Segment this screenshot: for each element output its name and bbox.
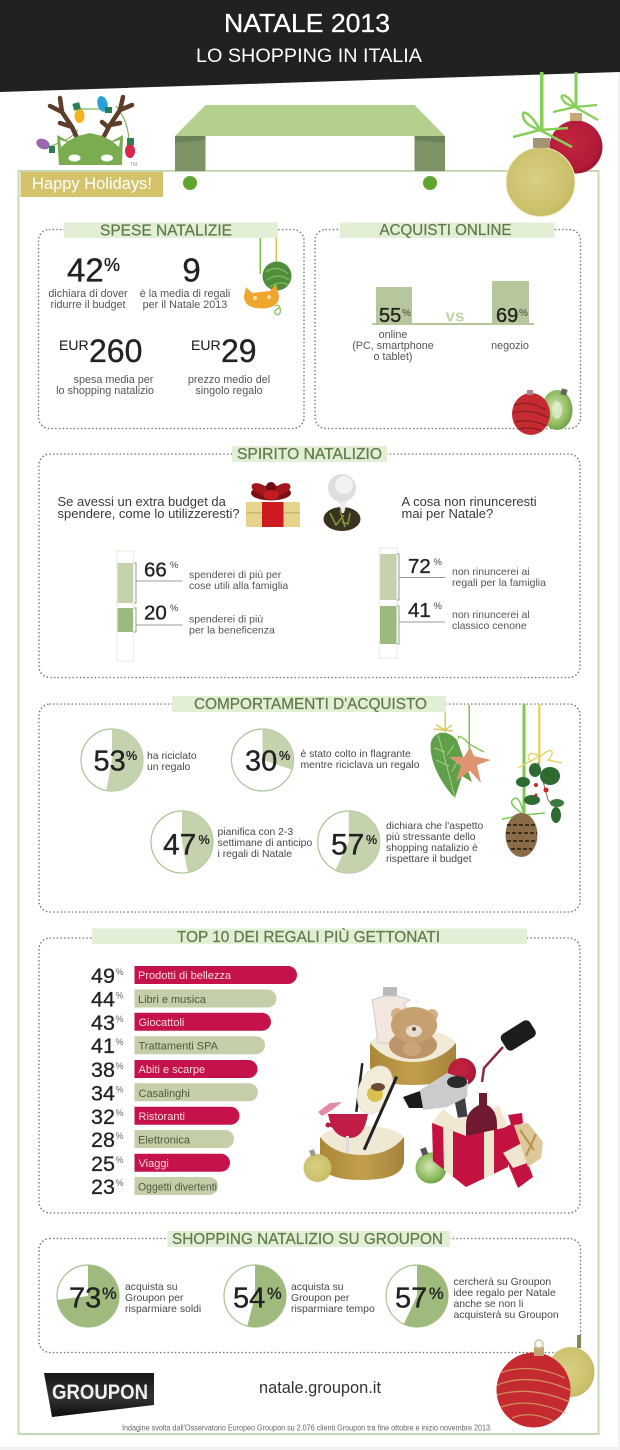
- icon: gift box: [246, 481, 300, 527]
- question: never give up: [402, 494, 537, 521]
- pie stat: 73 percent: acquista su: [125, 1282, 178, 1293]
- bar chart: online vs store: [352, 281, 534, 363]
- pie stat: 47 percent: i regali di Natale: [218, 849, 292, 860]
- pie stat: 47 percent: pianifica con 2-3: [218, 827, 293, 838]
- bar chart: online vs store: online: [379, 329, 407, 341]
- groupon logo: GROUPON: [52, 1381, 148, 1404]
- question: never give up: A cosa non rinunceresti: [402, 494, 537, 509]
- bar chart: top ten gifts: 49: [91, 964, 115, 988]
- icon: footer baubles: [496, 1335, 594, 1428]
- stat: EUR 260: 260: [89, 333, 142, 369]
- footnote: Indagine svolta dall'Osservatorio Europeo Groupon su 2.076 clienti Groupon tra fine ottobre e inizio novembre 2013.: [122, 1424, 492, 1432]
- bar chart: top ten gifts: Giocattoli: [138, 1017, 184, 1029]
- bar chart: online vs store: o tablet): [373, 351, 413, 363]
- question: never give up: mai per Natale?: [402, 506, 493, 521]
- bar chart: top ten gifts: %: [116, 990, 124, 1000]
- groupon logo: [44, 1373, 154, 1417]
- bar chart: top ten gifts: Elettronica: [138, 1134, 191, 1146]
- stat: EUR 29: EUR: [191, 337, 221, 353]
- icon: red and green baubles: [512, 388, 572, 435]
- stat: EUR 29: [188, 333, 270, 397]
- pie stat: 57 percent: %: [366, 833, 377, 847]
- icon: holly and pinecone: [502, 704, 564, 857]
- heading: TOP 10 DEI REGALI PIÙ GETTONATI: [177, 929, 440, 946]
- stat: 66 percent: %: [170, 560, 179, 571]
- heading: SHOPPING NATALIZIO SU GROUPON: [172, 1231, 443, 1248]
- icon: golf ball on turf: [324, 474, 360, 531]
- stacked bar: extra budget: [117, 551, 288, 661]
- pie stat: 47 percent: 47: [163, 828, 196, 862]
- stat: 41 percent: classico cenone: [452, 620, 527, 632]
- stat: EUR 29: 29: [221, 333, 257, 369]
- stat: 9 gifts: per il Natale 2013: [143, 299, 227, 311]
- icon: yarn ball and orange cat ornament: [244, 238, 292, 315]
- bar chart: online vs store: negozio: [491, 340, 529, 352]
- pie stat: 47 percent: %: [198, 833, 210, 847]
- red bauble, nail polish and hair dryer: [403, 1018, 538, 1120]
- title: NATALE 2013: [224, 8, 390, 38]
- bar chart: top ten gifts: %: [116, 1178, 124, 1188]
- bar chart: top ten gifts: Ristoranti: [138, 1111, 185, 1123]
- bar chart: top ten gifts: 23: [91, 1175, 115, 1199]
- stat: 42 percent: [48, 252, 128, 311]
- stat: EUR 260: lo shopping natalizio: [56, 385, 154, 397]
- pie stat: 30 percent: è stato colto in flagrante: [300, 749, 411, 760]
- pie stat: 54 percent: Groupon per: [291, 1293, 350, 1304]
- heading: SPIRITO NATALIZIO: [237, 446, 382, 463]
- panel: spese natalizie: [38, 222, 304, 428]
- pie stat: 73 percent: Groupon per: [125, 1293, 184, 1304]
- pie stat: 57 percent: [318, 811, 484, 873]
- stat: 20 percent: per la beneficenza: [189, 624, 275, 636]
- bar chart: top ten gifts: Prodotti di bellezza: [138, 970, 232, 982]
- stat: 66 percent: 66: [144, 558, 167, 582]
- question: extra budget: Se avessi un extra budget da: [58, 494, 227, 509]
- heading: [340, 222, 554, 239]
- bar chart: online vs store: (PC, smartphone: [352, 340, 434, 352]
- stat: 66 percent: cose utili alla famiglia: [189, 580, 288, 592]
- stat: 66 percent: spenderei di più per: [189, 569, 282, 581]
- pie stat: 57 percent: acquisterà su Groupon: [454, 1310, 559, 1321]
- bar chart: top ten gifts: 44: [91, 988, 115, 1012]
- open red gift box with bottle: [432, 1093, 543, 1188]
- pie stat: 47 percent: [151, 811, 312, 873]
- question: extra budget: [58, 494, 240, 521]
- upper hat box with perfume and teddy: [370, 987, 456, 1085]
- icon: top baubles with bows: [506, 72, 602, 216]
- pie stat: 57 percent: anche se non li: [454, 1299, 523, 1310]
- bar chart: online vs store: %: [519, 308, 528, 319]
- bar chart: top ten gifts: %: [116, 1108, 124, 1118]
- pie stat: 57 percent: più stressante dello: [386, 832, 476, 843]
- website url: natale.groupon.it: [259, 1379, 381, 1397]
- stat: 66 percent: [144, 558, 288, 592]
- stat: 72 percent: non rinuncerei ai: [452, 566, 530, 578]
- bar chart: online vs store: 69: [496, 305, 518, 327]
- bar chart: top ten gifts: Oggetti divertenti: [138, 1182, 217, 1194]
- heading: COMPORTAMENTI D'ACQUISTO: [194, 696, 427, 713]
- stat: 72 percent: regali per la famiglia: [452, 577, 546, 589]
- question: extra budget: spendere, come lo utilizzeresti?: [58, 506, 240, 521]
- stat: 42 percent: 42: [67, 252, 104, 288]
- stat: 72 percent: 72: [408, 555, 431, 578]
- stat: 20 percent: %: [170, 603, 179, 614]
- bar chart: top ten gifts: Libri e musica: [138, 994, 207, 1006]
- pie stat: 57 percent: shopping natalizio è: [386, 843, 478, 854]
- stat: EUR 260: EUR: [59, 337, 89, 353]
- stacked bar: never give up: [380, 548, 546, 658]
- bar chart: top ten gifts: Abiti e scarpe: [138, 1064, 205, 1076]
- icon: groupon cat mask with antlers and lights: [35, 95, 137, 168]
- pie stat: 54 percent: 54: [233, 1282, 265, 1314]
- pie stat: 54 percent: acquista su: [291, 1282, 344, 1293]
- pie stat: 57 percent: dichiara che l'aspetto: [386, 821, 484, 832]
- pie stat: 30 percent: 30: [245, 746, 277, 778]
- bar chart: top ten gifts: [91, 964, 297, 1199]
- stat: 41 percent: 41: [408, 599, 431, 622]
- bar chart: top ten gifts: 38: [91, 1058, 115, 1082]
- panel: comportamenti d'acquisto: [39, 696, 580, 912]
- heading: [64, 222, 278, 240]
- heading: SPESE NATALIZIE: [100, 222, 232, 240]
- pie stat: 53 percent: %: [126, 749, 137, 763]
- bar chart: online vs store: vs: [446, 306, 464, 326]
- heading: [92, 928, 527, 946]
- pie stat: 73 percent: risparmiare soldi: [125, 1304, 201, 1315]
- stat: 72 percent: [408, 555, 546, 589]
- pie stat: 57 percent: [386, 1265, 559, 1327]
- stat: EUR 260: [56, 333, 154, 397]
- pie stat: 54 percent: risparmiare tempo: [291, 1304, 375, 1315]
- bar chart: online vs store: 55: [379, 305, 401, 327]
- illustration: gift boxes with presents: [304, 987, 543, 1188]
- lower hat box with cocktail and sushi: [318, 1061, 404, 1180]
- bar chart: top ten gifts: Casalinghi: [138, 1088, 190, 1100]
- stat: 9 gifts: [140, 252, 230, 311]
- stat: EUR 29: singolo regalo: [195, 385, 263, 397]
- stat: 41 percent: [408, 599, 530, 632]
- stat: EUR 29: prezzo medio del: [188, 374, 270, 386]
- pie stat: 53 percent: un regalo: [147, 762, 191, 773]
- panel: top 10 regali: [39, 928, 580, 1213]
- stat: 41 percent: non rinuncerei al: [452, 609, 530, 621]
- stat: 20 percent: spenderei di più: [189, 614, 263, 626]
- pie stat: 54 percent: [224, 1265, 375, 1327]
- bar chart: top ten gifts: %: [116, 1014, 124, 1024]
- pie stat: 57 percent: cercherà su Groupon: [454, 1277, 551, 1288]
- bar chart: top ten gifts: Trattamenti SPA: [138, 1040, 219, 1052]
- header band: [0, 0, 620, 92]
- happy holidays tag: Happy Holidays!: [32, 174, 152, 193]
- stat: 41 percent: %: [434, 601, 442, 612]
- bar chart: top ten gifts: %: [116, 1037, 124, 1047]
- bar chart: top ten gifts: 41: [91, 1034, 115, 1058]
- pie stat: 30 percent: %: [279, 749, 290, 763]
- pie stat: 53 percent: 53: [94, 746, 126, 778]
- bar chart: top ten gifts: %: [116, 967, 124, 977]
- bar chart: top ten gifts: %: [116, 1061, 124, 1071]
- bar chart: top ten gifts: Viaggi: [138, 1158, 169, 1170]
- pie stat: 73 percent: [57, 1265, 201, 1327]
- pie stat: 54 percent: %: [267, 1285, 282, 1303]
- pie stat: 57 percent: 57: [395, 1282, 427, 1314]
- pie stat: 57 percent: idee regalo per Natale: [454, 1288, 556, 1299]
- bar chart: top ten gifts: 28: [91, 1128, 115, 1152]
- bar chart: top ten gifts: %: [116, 1131, 124, 1141]
- bar chart: top ten gifts: 34: [91, 1082, 115, 1106]
- gold and green baubles: [304, 1147, 446, 1184]
- pie stat: 57 percent: %: [429, 1285, 444, 1303]
- pie stat: 53 percent: [81, 729, 197, 791]
- pie stat: 53 percent: ha riciclato: [147, 751, 197, 762]
- stat: 20 percent: 20: [144, 602, 167, 624]
- heading: ACQUISTI ONLINE: [380, 222, 512, 239]
- icon: groupon cat mask with antlers and lights: TM: [130, 162, 137, 168]
- panel: spirito natalizio: [39, 446, 580, 678]
- pie stat: 73 percent: %: [102, 1285, 117, 1303]
- stat: 42 percent: %: [104, 255, 120, 275]
- stat: 9 gifts: 9: [182, 252, 201, 288]
- stat: 9 gifts: è la media di regali: [140, 288, 230, 300]
- pie stat: 57 percent: 57: [331, 828, 364, 862]
- stat: 20 percent: [144, 602, 275, 636]
- stat: 42 percent: ridurre il budget: [50, 299, 126, 311]
- panel: shopping natalizio su groupon: [39, 1231, 580, 1352]
- stat: 42 percent: dichiara di dover: [48, 288, 128, 300]
- panel: acquisti online: [315, 222, 580, 435]
- ribbon banner: [175, 105, 445, 190]
- bar chart: top ten gifts: %: [116, 1084, 124, 1094]
- bar chart: top ten gifts: %: [116, 1155, 124, 1165]
- pie stat: 47 percent: settimane di anticipo: [218, 838, 312, 849]
- pie stat: 30 percent: mentre riciclava un regalo: [300, 760, 420, 771]
- pie stat: 30 percent: [232, 729, 420, 791]
- bar chart: top ten gifts: 25: [91, 1152, 115, 1176]
- pie stat: 73 percent: 73: [69, 1282, 101, 1314]
- bar chart: online vs store: %: [402, 308, 411, 319]
- pie stat: 57 percent: rispettare il budget: [386, 854, 472, 865]
- subtitle: LO SHOPPING IN ITALIA: [196, 45, 422, 67]
- stat: 72 percent: %: [434, 557, 442, 568]
- bar chart: top ten gifts: 32: [91, 1105, 115, 1129]
- stat: EUR 260: spesa media per: [74, 374, 154, 386]
- happy holidays tag: [20, 172, 163, 197]
- icon: palm leaf and starfish: [431, 705, 491, 798]
- bar chart: top ten gifts: 43: [91, 1011, 115, 1035]
